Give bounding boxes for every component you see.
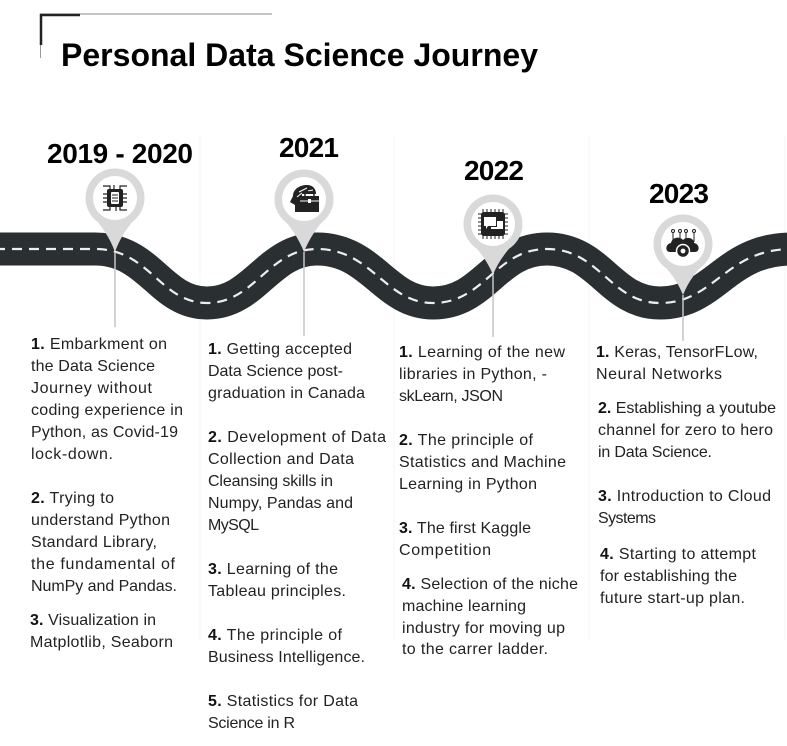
text column: 2019 - 2020: the fundamental of (31, 556, 176, 573)
text column: 2022: Learning in Python (399, 476, 537, 493)
icon: cloud with gear and nodes (666, 230, 699, 258)
text column: 2021: 2. Development of Data (208, 429, 386, 446)
text column: 2021: Business Intelligence. (208, 649, 365, 666)
text column: 2021: 3. Learning of the (208, 561, 338, 578)
text column: 2022: to the carrer ladder. (402, 641, 548, 658)
year: 2022: 2022 (464, 155, 524, 186)
text column: 2021: Cleansing skills in (208, 473, 333, 490)
text column: 2019 - 2020: Python, as Covid-19 (31, 424, 178, 441)
text column: 2023 (596, 344, 776, 607)
text column: 2022: 1. Learning of the new (399, 344, 565, 361)
text column: 2023: Systems (598, 510, 656, 527)
text column: 2023: 2. Establishing a youtube (598, 400, 776, 417)
text column: 2023: Neural Networks (596, 366, 722, 383)
text column: 2023: in Data Science. (598, 444, 712, 461)
icon: head with briefcase (290, 185, 319, 212)
text column: 2022: machine learning (402, 598, 526, 615)
text column: 2021: 4. The principle of (208, 627, 343, 644)
year: 2023: 2023 (649, 178, 709, 209)
text column: 2021: graduation in Canada (208, 385, 365, 402)
text column: 2023: 1. Keras, TensorFLow, (596, 344, 758, 361)
text column: 2022: skLearn, JSON (399, 388, 503, 405)
text column: 2019 - 2020 (30, 336, 183, 651)
text column: 2022: 4. Selection of the niche (402, 576, 578, 593)
text column: 2022: 2. The principle of (399, 432, 534, 449)
icon: processor with speech bubbles (478, 209, 508, 239)
text column: 2023: 3. Introduction to Cloud (598, 488, 771, 505)
winding road (0, 249, 787, 303)
text column: 2022 (399, 344, 578, 658)
text column: 2023: 4. Starting to attempt (600, 546, 757, 563)
text column: 2022: 3. The first Kaggle (399, 520, 531, 537)
text column: 2021: Science in R (208, 715, 295, 732)
text column: 2021: Numpy, Pandas and (208, 495, 353, 512)
text column: 2019 - 2020: Standard Library, (31, 534, 157, 551)
text column: 2019 - 2020: NumPy and Pandas. (31, 578, 177, 595)
text column: 2021: 1. Getting accepted (208, 341, 352, 358)
text column: 2019 - 2020: the Data Science (31, 358, 155, 375)
text column: 2021: MySQL (208, 517, 259, 534)
text column: 2019 - 2020: 2. Trying to (31, 490, 114, 507)
text column: 2023: future start-up plan. (600, 590, 745, 607)
title: Personal Data Science Journey (61, 37, 538, 73)
pin 3: processor chat icon (464, 194, 522, 337)
text column: 2023: channel for zero to hero (598, 422, 773, 439)
text column: 2022: industry for moving up (402, 620, 565, 637)
text column: 2021: Collection and Data (208, 451, 354, 468)
year: 2021: 2021 (279, 132, 339, 163)
text column: 2019 - 2020: 3. Visualization in (30, 612, 156, 629)
text column: 2021: 5. Statistics for Data (208, 693, 358, 710)
text column: 2019 - 2020: Journey without (31, 380, 153, 397)
pin 2: head and briefcase icon (274, 170, 334, 336)
text column: 2019 - 2020: lock-down. (31, 446, 113, 463)
text column: 2021: Tableau principles. (208, 583, 346, 600)
text column: 2022: libraries in Python, - (399, 366, 547, 383)
icon: circuit chip (103, 185, 127, 211)
text column: 2019 - 2020: coding experience in (31, 402, 183, 419)
text column: 2019 - 2020: Matplotlib, Seaborn (30, 634, 173, 651)
text column: 2022: Statistics and Machine (399, 454, 566, 471)
text column: 2021 (208, 341, 386, 732)
pin 1: chip icon (86, 168, 144, 327)
text column: 2021: Data Science post- (208, 363, 343, 380)
corner bracket (40, 14, 272, 58)
text column: 2023: for establishing the (600, 568, 737, 585)
text column: 2019 - 2020: understand Python (31, 512, 170, 529)
text column: 2019 - 2020: 1. Embarkment on (31, 336, 167, 353)
text column: 2022: Competition (399, 542, 491, 559)
pin 4: cloud gear icon (654, 214, 712, 341)
year: 2019 - 2020: 2019 - 2020 (47, 138, 193, 169)
